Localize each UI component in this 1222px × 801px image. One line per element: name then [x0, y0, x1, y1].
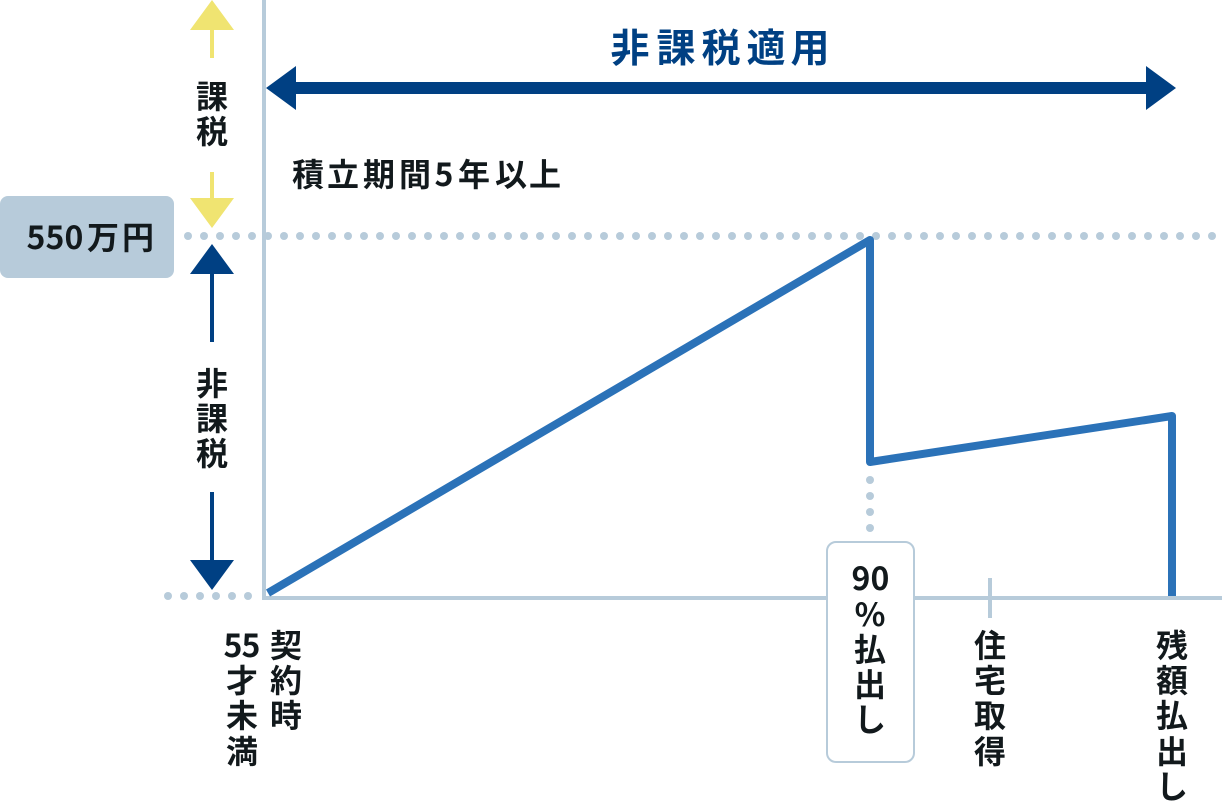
- label: home purchase: 住宅取得: [974, 621, 1006, 773]
- limit badge: 5.5 million yen: 550万円: [27, 213, 154, 259]
- callout: 90% withdrawal: 90%払出し: [852, 554, 889, 741]
- label: tax-free: 非課税: [196, 359, 228, 475]
- y axis: [262, 0, 266, 600]
- arrow: taxable downward: [190, 172, 234, 228]
- title: 非課税適用: [610, 18, 830, 74]
- connector dots to 90% withdrawal: [866, 476, 874, 532]
- limit badge: 5.5 million yen: [0, 196, 174, 278]
- arrow: tax-free downward: [190, 492, 234, 590]
- arrow: tax-free upward: [190, 244, 234, 342]
- x axis: [262, 596, 1222, 600]
- baseline dotted line: [164, 592, 252, 600]
- label: contract: 契約時: [270, 621, 302, 737]
- 550 limit dotted line: [184, 232, 1216, 240]
- arrow: taxable upward: [190, 0, 234, 58]
- label: taxable: 課税: [196, 72, 228, 153]
- arrow: tax-free period span: [266, 66, 1176, 110]
- balance line chart: [268, 240, 1172, 596]
- savings period label: 積立期間5年以上: [292, 150, 561, 196]
- callout: 90% withdrawal: [827, 542, 914, 762]
- label: under 55: 55才未満: [224, 621, 260, 773]
- tick: home purchase: [988, 578, 992, 618]
